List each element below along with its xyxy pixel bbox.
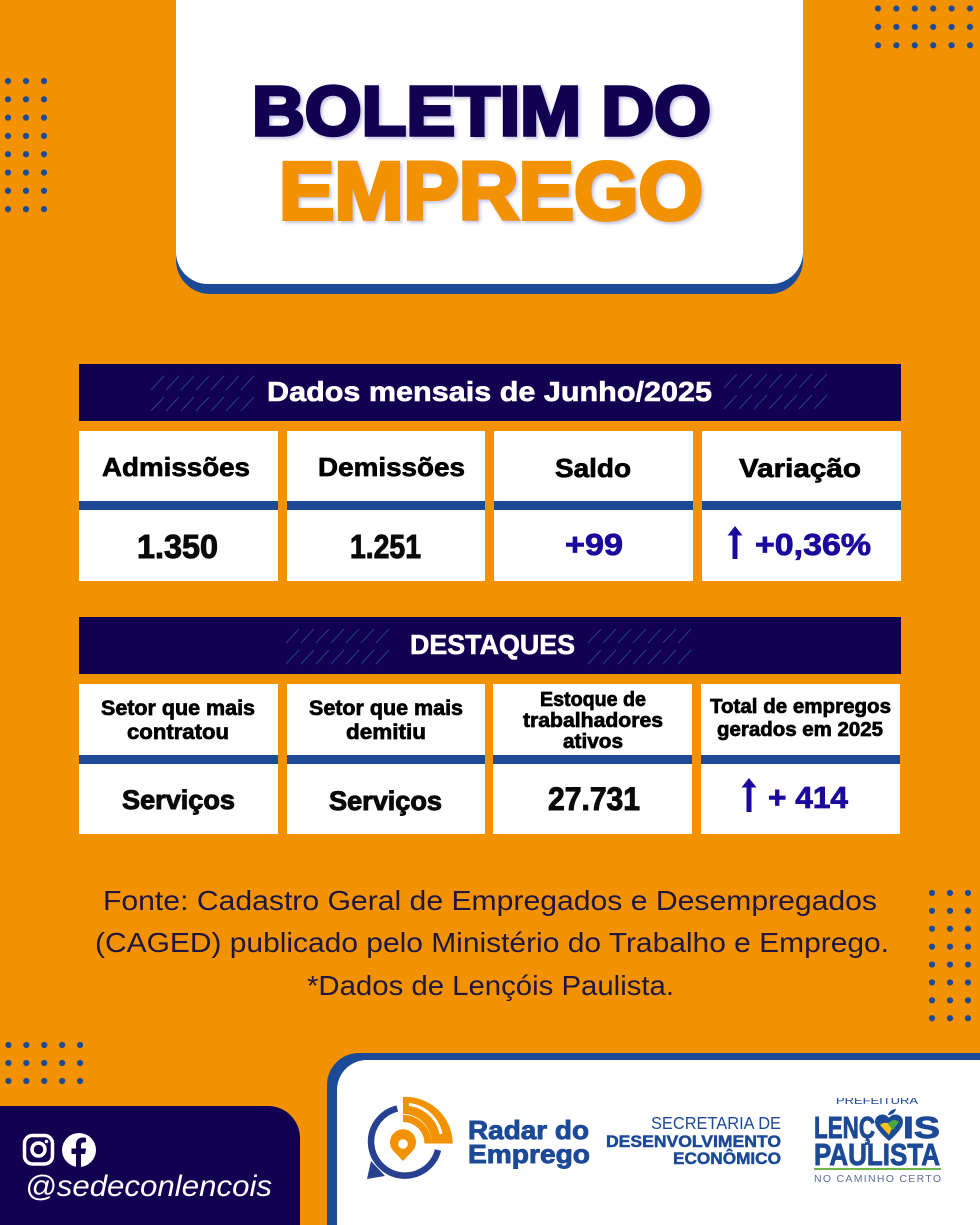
header: highlights: [79, 617, 901, 674]
panel: logos: [327, 1053, 980, 1225]
social handle: @sedeconlencois: [25, 1170, 272, 1203]
card: sector that hired most: [79, 684, 278, 834]
icon: radar: [367, 1097, 453, 1179]
card: sector that fired most: Setor que mais: [309, 697, 463, 720]
logo: Prefeitura de Lençóis Paulista: [814, 1090, 941, 1185]
title: line 1: BOLETIM DO: [252, 72, 711, 150]
icon: heart: [875, 1109, 903, 1141]
logo: Prefeitura de Lençóis Paulista: PAULISTA: [814, 1137, 940, 1172]
header: monthly data: [79, 364, 901, 421]
card: active workers: 27.731: [548, 781, 640, 817]
logo: Secretaria de Desenvolvimento Econômico: [606, 1113, 781, 1168]
logo: Prefeitura de Lençóis Paulista: LENÇ: [814, 1110, 875, 1145]
card: total jobs in 2025: Total de empregos: [710, 696, 891, 718]
card: active workers: [493, 684, 692, 834]
logo: Secretaria de Desenvolvimento Econômico: SECRETARIA DE: [651, 1113, 781, 1133]
logo: Prefeitura de Lençóis Paulista: PREFEITURA: [836, 1095, 918, 1107]
card: active workers: trabalhadores: [523, 710, 663, 732]
card: Variação: Variação: [739, 453, 861, 483]
logo: Radar do Emprego: [367, 1097, 590, 1179]
card: total jobs in 2025: gerados em 2025: [717, 719, 883, 741]
logo: Secretaria de Desenvolvimento Econômico: ECONÔMICO: [673, 1149, 781, 1168]
header: highlights: DESTAQUES: [410, 629, 575, 660]
card: sector that hired most: Serviços: [122, 785, 235, 815]
dot pattern: top right: [869, 0, 980, 55]
icon: facebook: [62, 1133, 96, 1167]
card: Demissões: 1.251: [350, 528, 421, 565]
card: sector that fired most: [287, 684, 485, 834]
card: Demissões: Demissões: [318, 452, 465, 482]
panel: social media: [0, 1106, 300, 1225]
icon: instagram: [24, 1136, 52, 1164]
card: sector that fired most: Serviços: [329, 786, 442, 816]
card: sector that fired most: demitiu: [346, 721, 426, 744]
card: active workers: ativos: [563, 731, 623, 753]
source note: Fonte: Cadastro Geral de Empregados e Desempregados: [103, 885, 877, 916]
header: monthly data: Dados mensais de Junho/2025: [267, 376, 712, 407]
card: Admissões: 1.350: [137, 528, 218, 565]
card: active workers: Estoque de: [540, 689, 646, 711]
source note: *Dados de Lençóis Paulista.: [307, 970, 674, 1001]
icon: up arrow: [742, 778, 756, 812]
card: sector that hired most: Setor que mais: [101, 697, 255, 720]
card: Admissões: [79, 431, 278, 581]
card: Demissões: [287, 431, 485, 581]
card: Saldo: Saldo: [555, 453, 631, 483]
logo: Secretaria de Desenvolvimento Econômico: DESENVOLVIMENTO: [606, 1132, 781, 1151]
source note: (CAGED) publicado pelo Ministério do Trabalho e Emprego.: [95, 927, 889, 958]
title: line 2: EMPREGO: [279, 146, 703, 237]
card: total jobs in 2025: + 414: [768, 780, 849, 815]
card: Saldo: +99: [565, 527, 623, 562]
logo: Prefeitura de Lençóis Paulista: IS: [903, 1110, 940, 1145]
card: Variação: +0,36%: [755, 527, 871, 562]
card: Variação: [702, 431, 901, 581]
icon: up arrow: [728, 526, 742, 559]
logo: Radar do Emprego: Emprego: [468, 1139, 590, 1169]
dot pattern: bottom left: [0, 1036, 89, 1090]
dot pattern: right: [923, 884, 977, 1027]
card: Admissões: Admissões: [102, 452, 250, 482]
logo: Prefeitura de Lençóis Paulista: NO CAMINHO CERTO: [814, 1173, 941, 1185]
card: total jobs in 2025: [701, 684, 900, 834]
panel: title: [176, 0, 803, 294]
logo: Radar do Emprego: Radar do: [468, 1115, 589, 1145]
source note: [95, 885, 889, 1001]
dot pattern: left: [0, 72, 53, 219]
card: Saldo: [494, 431, 693, 581]
card: sector that hired most: contratou: [127, 721, 229, 744]
